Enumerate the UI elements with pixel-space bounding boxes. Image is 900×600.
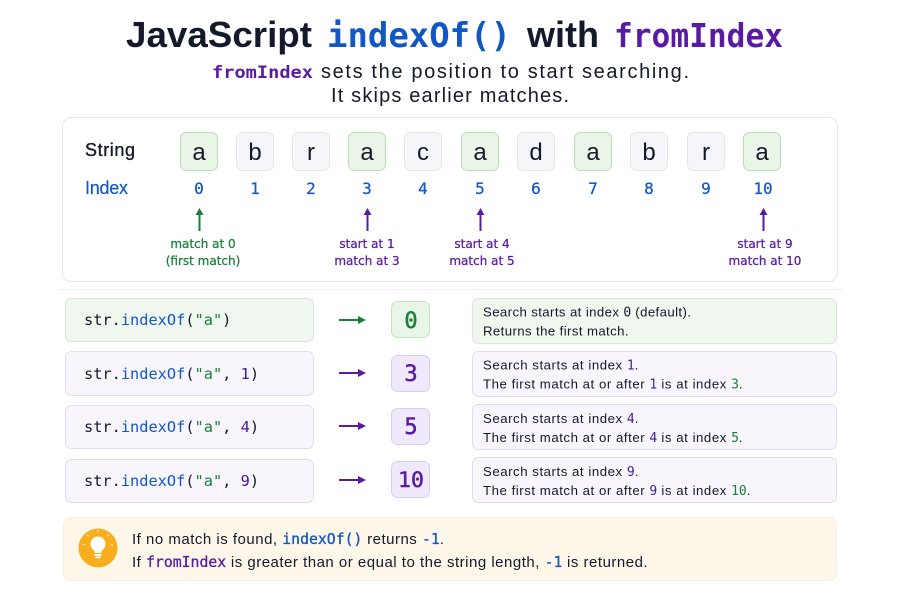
row 3 result: 5 — [404, 415, 418, 440]
caption: start at 9: match at 10 — [729, 254, 801, 268]
index numbers: 1 — [250, 179, 260, 198]
row 4 code: str.indexOf("a", 9) — [84, 472, 259, 490]
arrow: start at 9 — [760, 208, 768, 231]
note line 1: If no match is found, indexOf() returns -1. — [132, 531, 444, 548]
character cells: b — [248, 139, 262, 166]
callout: notes — [64, 518, 836, 580]
character cells: a — [360, 139, 374, 166]
character cells: a — [192, 139, 206, 166]
index numbers: 6 — [531, 179, 541, 198]
row 2 explanation — [472, 352, 836, 396]
row 1 code — [66, 298, 314, 342]
row 2 code: str.indexOf("a", 1) — [84, 365, 259, 383]
caption: start at 4 — [449, 237, 515, 268]
character cells: r — [307, 139, 315, 166]
panel: string and index diagram — [62, 118, 838, 282]
index numbers: 3 — [362, 179, 372, 198]
row 2 code — [66, 352, 314, 396]
row 3 result — [392, 408, 430, 444]
subtitle: It skips earlier matches. — [331, 85, 569, 107]
row 2 result: 3 — [404, 362, 418, 387]
caption: start at 1 — [334, 237, 400, 268]
row 3 explanation — [472, 404, 836, 450]
caption: start at 1: start at 1 — [339, 237, 395, 251]
icon: light bulb — [78, 528, 118, 568]
caption: match at 0: match at 0 — [170, 237, 236, 251]
row 3 explanation: Search starts at index 4. — [483, 411, 639, 427]
subtitle: fromIndex — [212, 63, 313, 83]
row 2 explanation: Search starts at index 1. — [483, 358, 639, 374]
character cells: a — [755, 139, 769, 166]
title: with — [526, 14, 599, 55]
row 1 arrow — [339, 316, 366, 324]
title: JavaScript — [126, 14, 312, 55]
character cells: c — [417, 139, 429, 166]
row 1 explanation: Search starts at index 0 (default). — [483, 304, 691, 320]
subtitle: sets the position to start searching. — [321, 61, 689, 83]
arrow: start at 1 — [364, 208, 372, 231]
note line 2: If fromIndex is greater than or equal to the string length, -1 is returned. — [132, 554, 648, 571]
row 4 result: 10 — [398, 468, 424, 493]
index numbers: 0 — [194, 179, 204, 198]
character cells: d — [529, 139, 543, 166]
index numbers: 8 — [644, 179, 654, 198]
title — [126, 14, 783, 56]
row 3 code: str.indexOf("a", 4) — [84, 418, 259, 436]
character cells: a — [473, 139, 487, 166]
row 4 explanation: Search starts at index 9. — [483, 464, 639, 480]
caption: start at 4: start at 4 — [454, 237, 510, 251]
row 3 code — [66, 406, 314, 448]
row 4 result — [392, 462, 430, 498]
row 4 code — [66, 460, 314, 502]
index numbers: 4 — [418, 179, 428, 198]
caption: start at 9 — [729, 237, 801, 268]
character cells: r — [702, 139, 710, 166]
label: Index: Index — [85, 178, 128, 198]
row 1 code: str.indexOf("a") — [84, 311, 231, 329]
label: String: String — [85, 140, 135, 160]
index numbers: 5 — [475, 179, 485, 198]
character cells: b — [642, 139, 656, 166]
arrow: match at 0 — [196, 208, 204, 231]
row 1 explanation — [472, 298, 836, 344]
index numbers: 9 — [701, 179, 711, 198]
index numbers: 10 — [753, 179, 773, 198]
row 1 result — [392, 302, 430, 338]
title: fromIndex — [614, 16, 783, 55]
character cells: a — [586, 139, 600, 166]
index numbers — [194, 179, 773, 198]
row 4 arrow — [339, 476, 366, 484]
caption: start at 1: match at 3 — [334, 254, 400, 268]
caption: start at 4: match at 5 — [449, 254, 515, 268]
row 2 result — [392, 356, 430, 392]
caption: start at 9: start at 9 — [737, 237, 793, 251]
index numbers: 7 — [588, 179, 598, 198]
row 1 explanation: Returns the first match. — [483, 324, 629, 338]
row 3 explanation: The first match at or after 4 is at index 5. — [483, 430, 743, 446]
caption: match at 0 — [166, 237, 240, 268]
row 4 explanation: The first match at or after 9 is at index 10. — [483, 483, 751, 499]
row 2 arrow — [339, 369, 366, 377]
row 1 result: 0 — [404, 309, 418, 334]
index numbers: 2 — [306, 179, 316, 198]
subtitle — [212, 61, 689, 107]
caption: match at 0: (first match) — [166, 254, 240, 268]
title: indexOf() — [327, 16, 511, 56]
arrow: start at 4 — [476, 208, 484, 231]
row 3 arrow — [339, 422, 366, 430]
row 2 explanation: The first match at or after 1 is at index 3. — [483, 376, 743, 392]
row 4 explanation — [472, 458, 836, 502]
character cells — [180, 132, 780, 170]
